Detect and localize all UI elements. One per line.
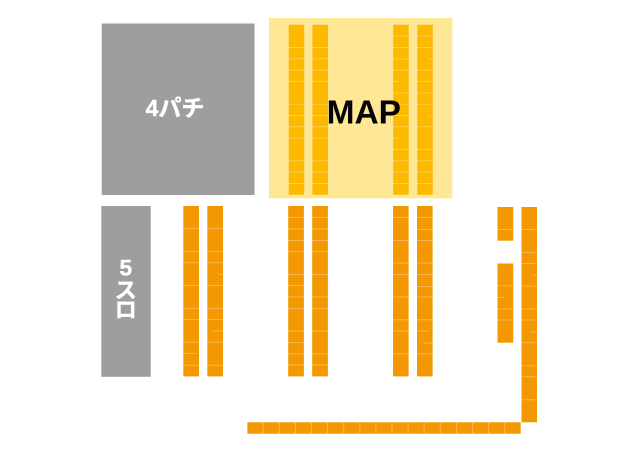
seat column 3 xyxy=(288,206,304,376)
seat block: upper right short xyxy=(498,207,513,241)
label: MAP: MAP xyxy=(327,94,401,131)
map column 2 xyxy=(312,25,328,195)
label: 5スロ: ス xyxy=(115,278,137,303)
label: 5スロ: 5 xyxy=(119,256,132,280)
label: 5スロ xyxy=(115,256,137,322)
panel: 5スロ xyxy=(101,206,151,377)
map column 1 xyxy=(289,25,304,195)
map column 4 xyxy=(417,25,433,195)
seat column 4 xyxy=(312,206,328,376)
label: 5スロ: ロ xyxy=(115,298,137,322)
seat block: right middle xyxy=(498,264,513,343)
seat column 2 xyxy=(207,206,223,376)
panel: MAP highlight area xyxy=(269,18,452,198)
seat column 6 xyxy=(417,206,433,376)
panel: 4パチ xyxy=(102,24,254,195)
map column 3 xyxy=(393,25,409,195)
seat column: far right long xyxy=(522,207,537,422)
seat column 5 xyxy=(393,206,409,376)
seat row: bottom xyxy=(247,422,521,434)
seat column 1 xyxy=(183,206,199,376)
label: 4パチ: 4パチ xyxy=(146,95,204,121)
